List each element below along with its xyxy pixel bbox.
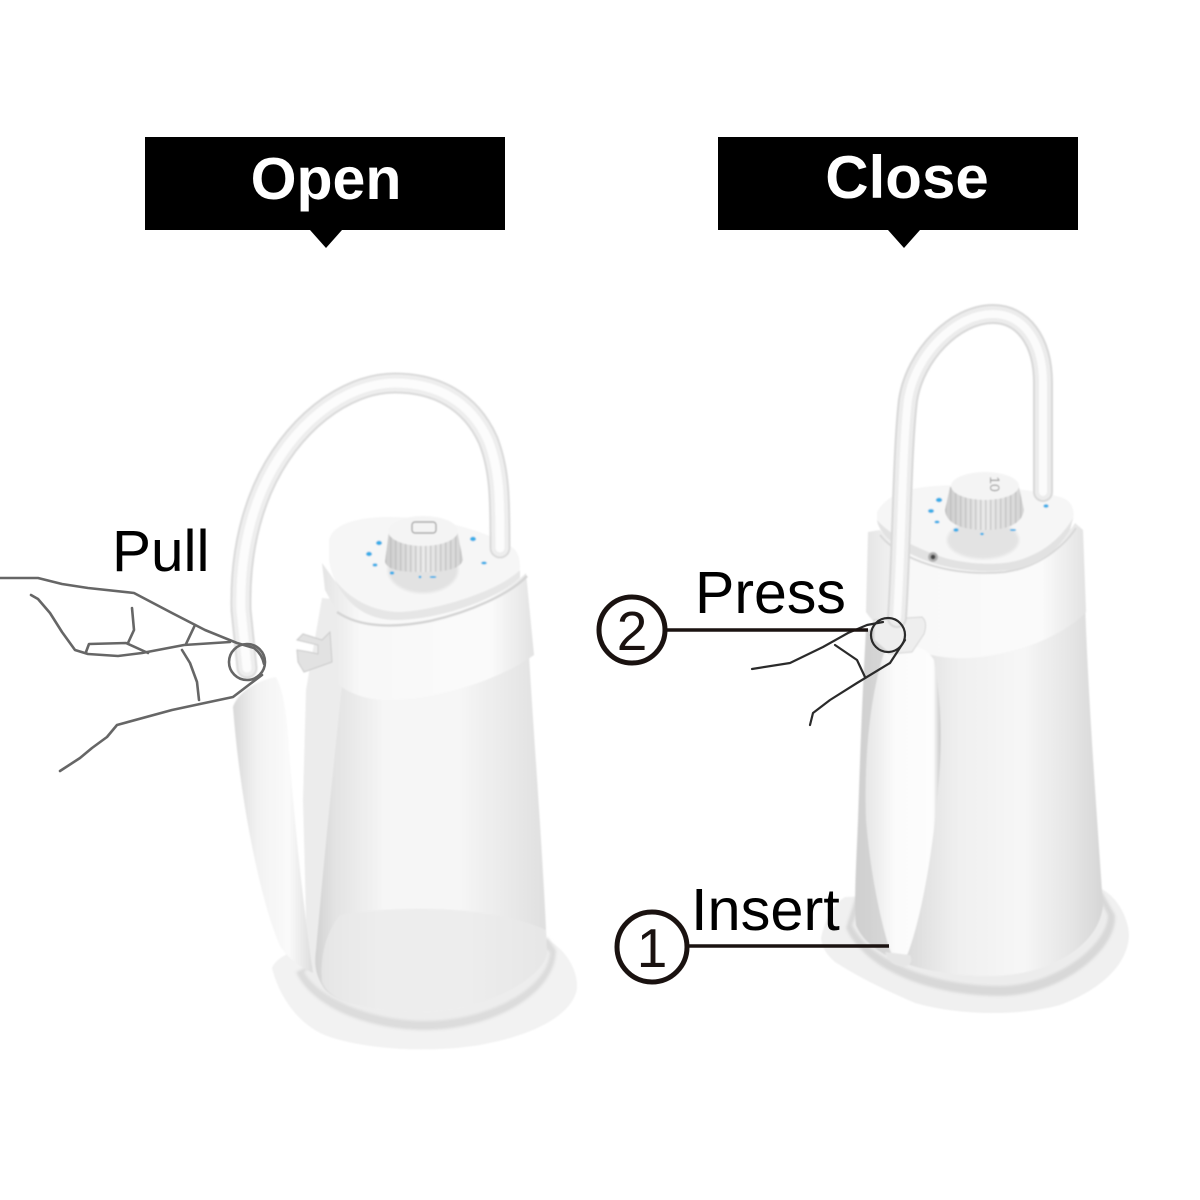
folded foot strap, closed (866, 646, 941, 959)
icon: hand pulling (0, 578, 265, 771)
blue indicator dots, open (366, 537, 487, 578)
knob logo, closed: 10 (987, 476, 1003, 492)
illustration: open lamp (233, 383, 577, 1049)
rear support strip (303, 598, 342, 970)
step 1 numeral: 1 (637, 917, 667, 979)
headphone jack (928, 552, 938, 562)
strap clip, closed (874, 617, 926, 654)
icon: hand pressing (752, 618, 905, 725)
label: Pull: Pull (112, 519, 210, 584)
heading: Open: Open (251, 146, 401, 212)
knob reflection (388, 547, 458, 593)
lamp base, open (272, 938, 577, 1049)
lamp body, closed (855, 600, 1103, 976)
label: Press: Press (695, 560, 846, 626)
strap foot tab (885, 952, 911, 966)
top cap, closed (877, 485, 1074, 571)
illustration: closed lamp (821, 314, 1129, 1013)
step 2 numeral: 2 (617, 600, 647, 662)
folded foot strap, open (233, 677, 313, 973)
dial knob, closed (945, 472, 1024, 530)
side hook (297, 632, 332, 672)
label: Insert: Insert (691, 876, 840, 943)
knob reflection, closed (947, 521, 1019, 559)
knob logo (412, 522, 436, 533)
collar band, open (322, 563, 534, 700)
handle, closed (897, 314, 1043, 618)
step 1 leader line (688, 944, 889, 948)
lamp body, open (315, 655, 547, 1012)
blue indicator dots, closed (928, 498, 1049, 535)
dial knob, open (385, 516, 463, 572)
heading: Close: Close (825, 144, 989, 211)
step 2 leader line (666, 628, 868, 632)
callout: step 1 marker (617, 912, 889, 982)
callout: step 2 marker (599, 597, 868, 663)
handle, open (241, 383, 500, 668)
lamp base, closed (821, 888, 1129, 1013)
collar band, closed (866, 523, 1086, 658)
top cap, open (329, 517, 520, 620)
panel: Open banner (145, 137, 505, 248)
panel: Close banner (718, 137, 1078, 248)
